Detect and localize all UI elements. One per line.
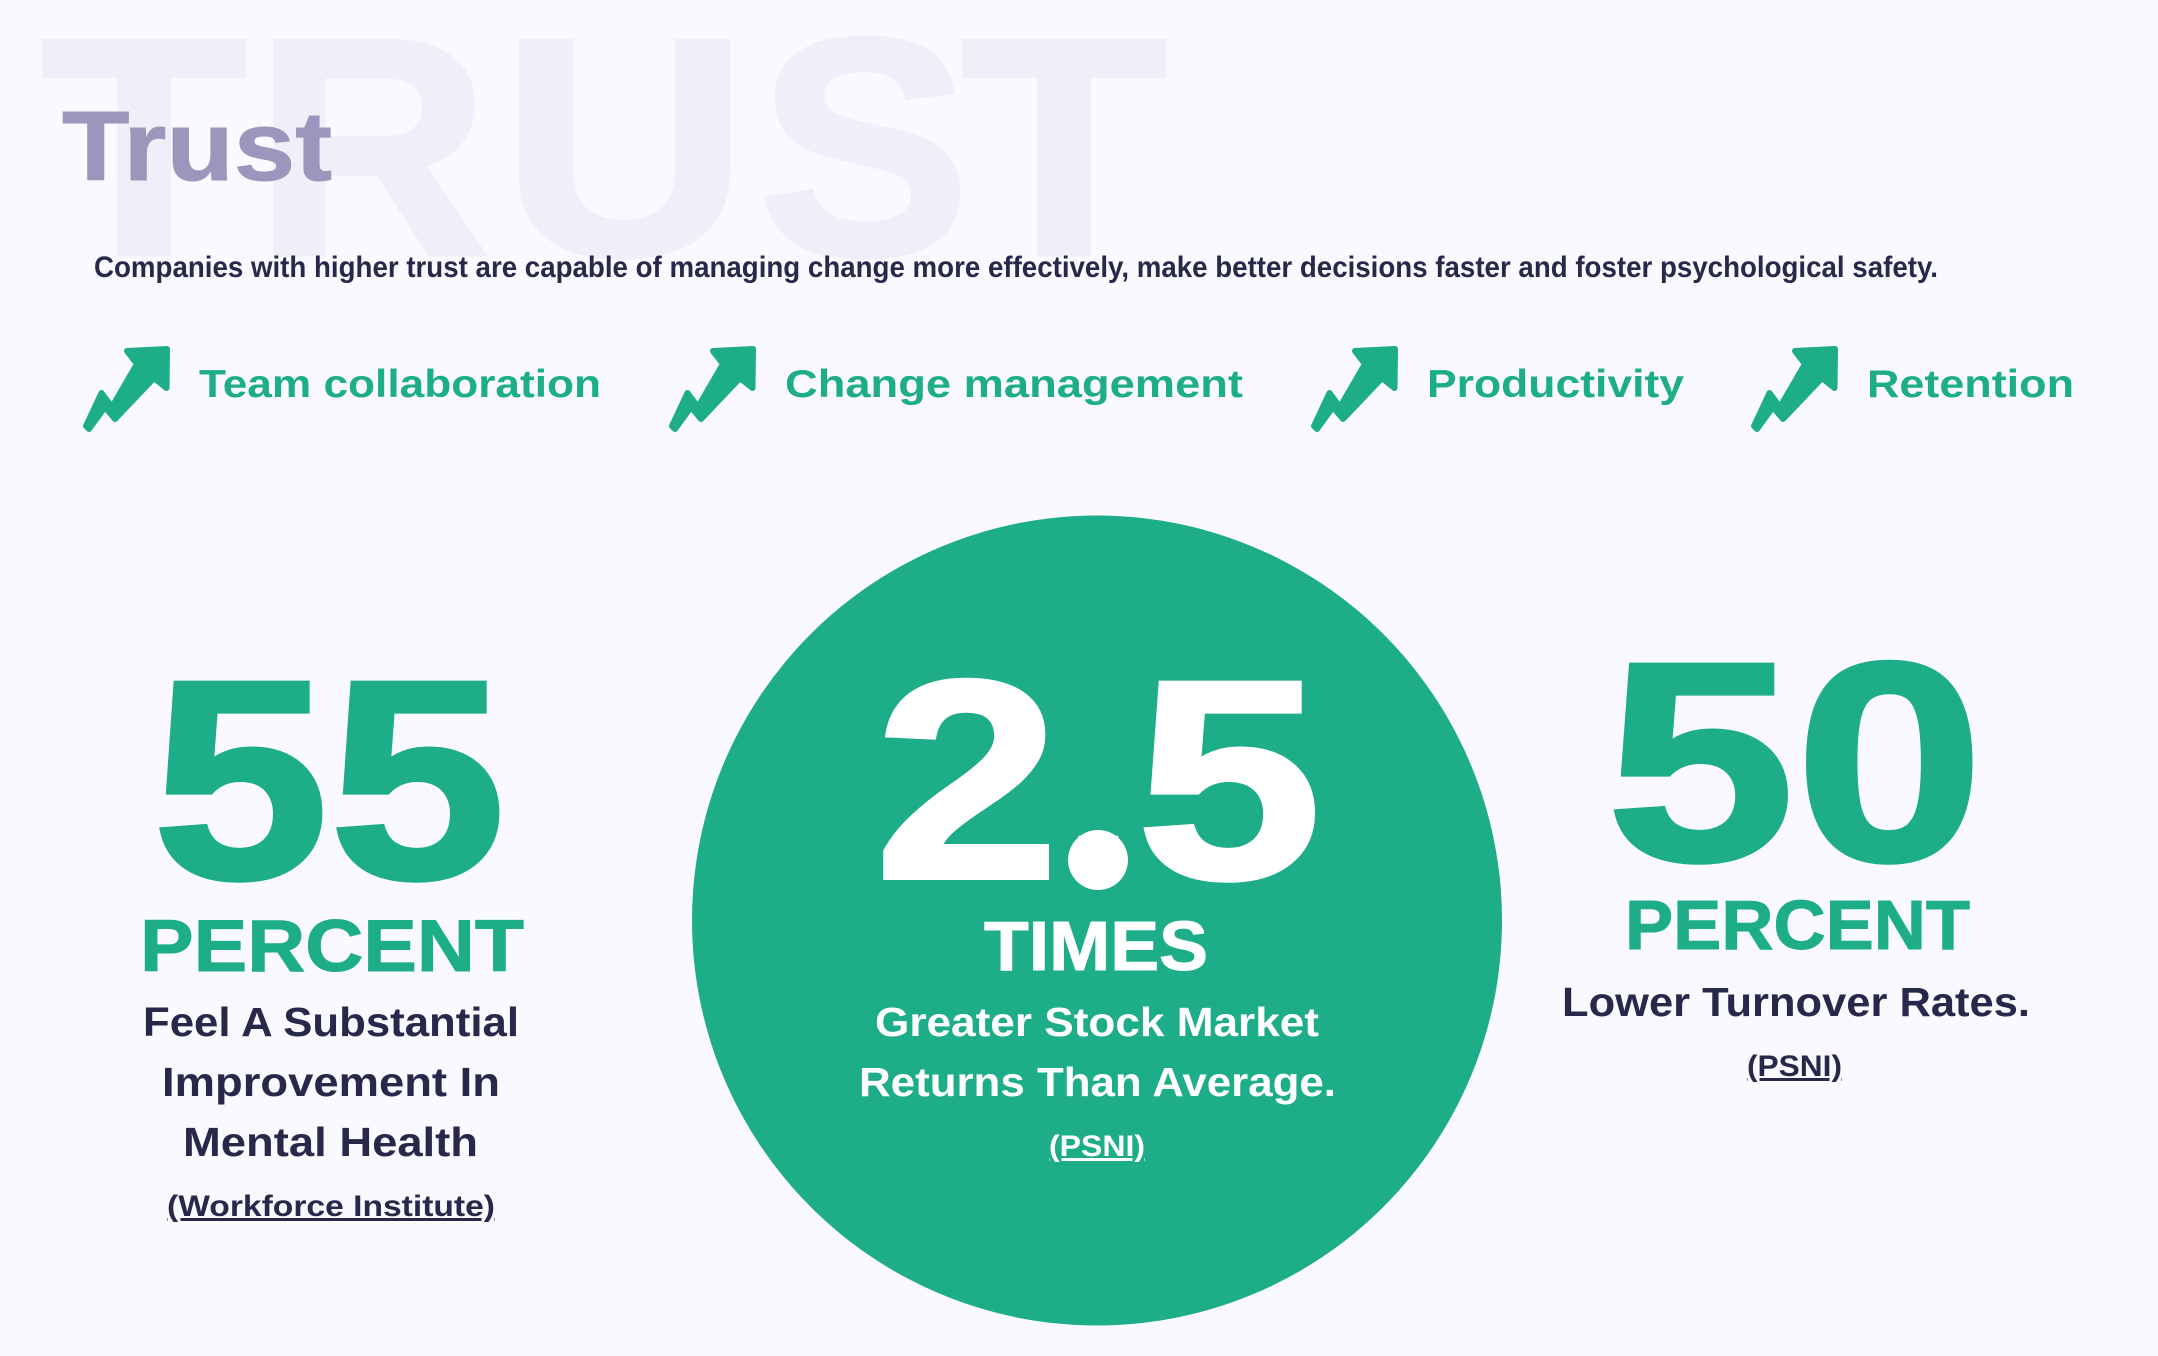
benefit: team collaboration [86,349,601,429]
heading: Trust: Trust [62,91,332,201]
icon: rising arrow [86,349,167,429]
description: Feel A Substantial [143,999,519,1045]
description [859,999,1336,1105]
stat: 55 percent [140,622,524,1223]
number: 5 [1136,622,1322,939]
description: Mental Health [183,1119,478,1165]
number: 2 [874,622,1060,939]
number [874,622,1322,939]
description: Lower Turnover Rates. [1562,979,2030,1025]
benefit: productivity [1314,349,1684,429]
icon: rising arrow [1754,349,1835,429]
label: Productivity [1427,363,1684,406]
label: Retention [1867,363,2074,406]
number: . [1059,622,1138,939]
icon: rising arrow [672,349,753,429]
source link: (Workforce Institute) [167,1190,495,1223]
benefit: retention [1754,349,2074,429]
unit: TIMES [984,907,1208,985]
label: Team collaboration [199,363,601,406]
number: 55 [152,622,506,939]
unit: PERCENT [140,906,524,987]
benefit: change management [672,349,1243,429]
label: Change management [785,363,1243,406]
stat: 2.5 times [692,516,1502,1326]
stat: 50 percent [1562,604,2030,1083]
icon: rising arrow [1314,349,1395,429]
green circle [692,516,1502,1326]
intro text: Companies with higher trust are capable of managing change more effectively, make better decisions faster and foster psychological safety. [94,251,1938,284]
number: 50 [1606,604,1984,921]
unit: PERCENT [1625,886,1970,964]
description: Returns Than Average. [859,1059,1336,1105]
description: Greater Stock Market [875,999,1319,1045]
description: Improvement In [162,1059,500,1105]
source link: (PSNI) [1747,1050,1842,1083]
source link: (PSNI) [1049,1130,1145,1163]
description [143,999,519,1165]
watermark word TRUST [41,0,1167,320]
